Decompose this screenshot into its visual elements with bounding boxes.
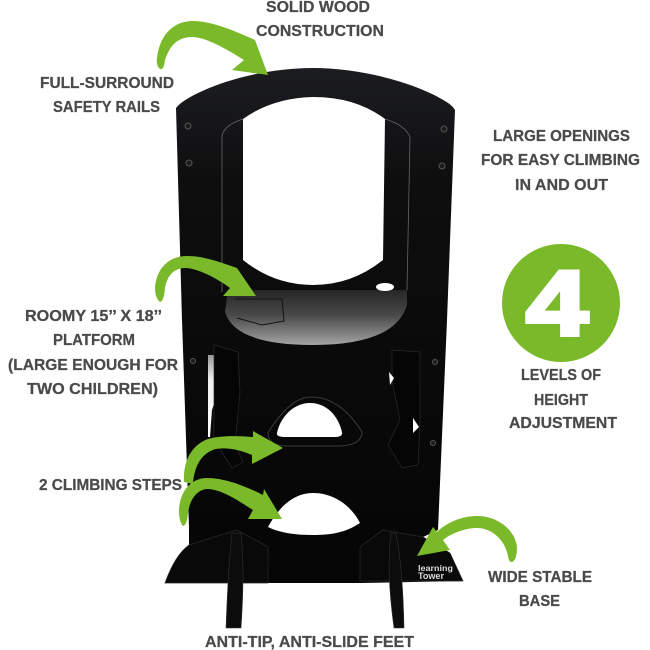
tower body [165,68,463,583]
label: roomy platform: (LARGE ENOUGH FOR [8,357,178,374]
label: full-surround safety rails [40,75,174,116]
badge: 4 levels [502,244,620,362]
learning tower product photo [165,68,463,628]
label: large openings [481,128,640,194]
label: wide stable base: WIDE STABLE [488,569,592,586]
label: wide stable base: BASE [519,593,560,610]
label: full-surround safety rails: FULL-SURROUND [40,75,174,92]
arrow: lower climbing step [179,478,282,526]
badge: 4 levels: 4 [526,253,588,355]
label: levels of height adjustment: LEVELS OF [521,367,601,384]
label: roomy platform [8,308,178,398]
label: solid wood construction [256,0,384,40]
platform gap [376,283,394,291]
label: levels of height adjustment: HEIGHT [534,392,588,409]
left anti-slide foot [226,533,243,628]
brand logo: Tower [418,571,444,581]
arrow: platform [155,256,256,302]
right foot block [360,530,463,581]
arrow: solid wood / safety rails [157,21,268,75]
window frame side lines [222,119,410,292]
screws [185,123,447,446]
upper step frame [268,397,362,446]
label: large openings: IN AND OUT [515,177,608,194]
label: large openings: LARGE OPENINGS [493,128,630,145]
label: wide stable base [488,569,592,610]
label: levels of height adjustment: ADJUSTMENT [509,415,617,432]
label: levels of height adjustment [509,367,617,432]
height adjustment slots [208,345,420,468]
left foot block [165,530,268,583]
right anti-slide foot [389,533,404,628]
brand logo [418,564,453,581]
brand logo: learning [418,564,453,573]
label: large openings: FOR EASY CLIMBING [481,152,640,169]
label: climbing steps: 2 CLIMBING STEPS [39,477,182,494]
label: roomy platform: TWO CHILDREN) [27,381,158,398]
label: full-surround safety rails: SAFETY RAILS [53,99,160,116]
arrow: wide stable base [417,516,517,562]
platform hatch outline [235,299,284,325]
label: roomy platform: ROOMY 15’’ X 18’’ [25,308,162,325]
platform [225,290,407,345]
label: solid wood construction: CONSTRUCTION [256,23,384,40]
arrow: upper climbing step [184,431,283,484]
label: roomy platform: PLATFORM [53,332,135,349]
